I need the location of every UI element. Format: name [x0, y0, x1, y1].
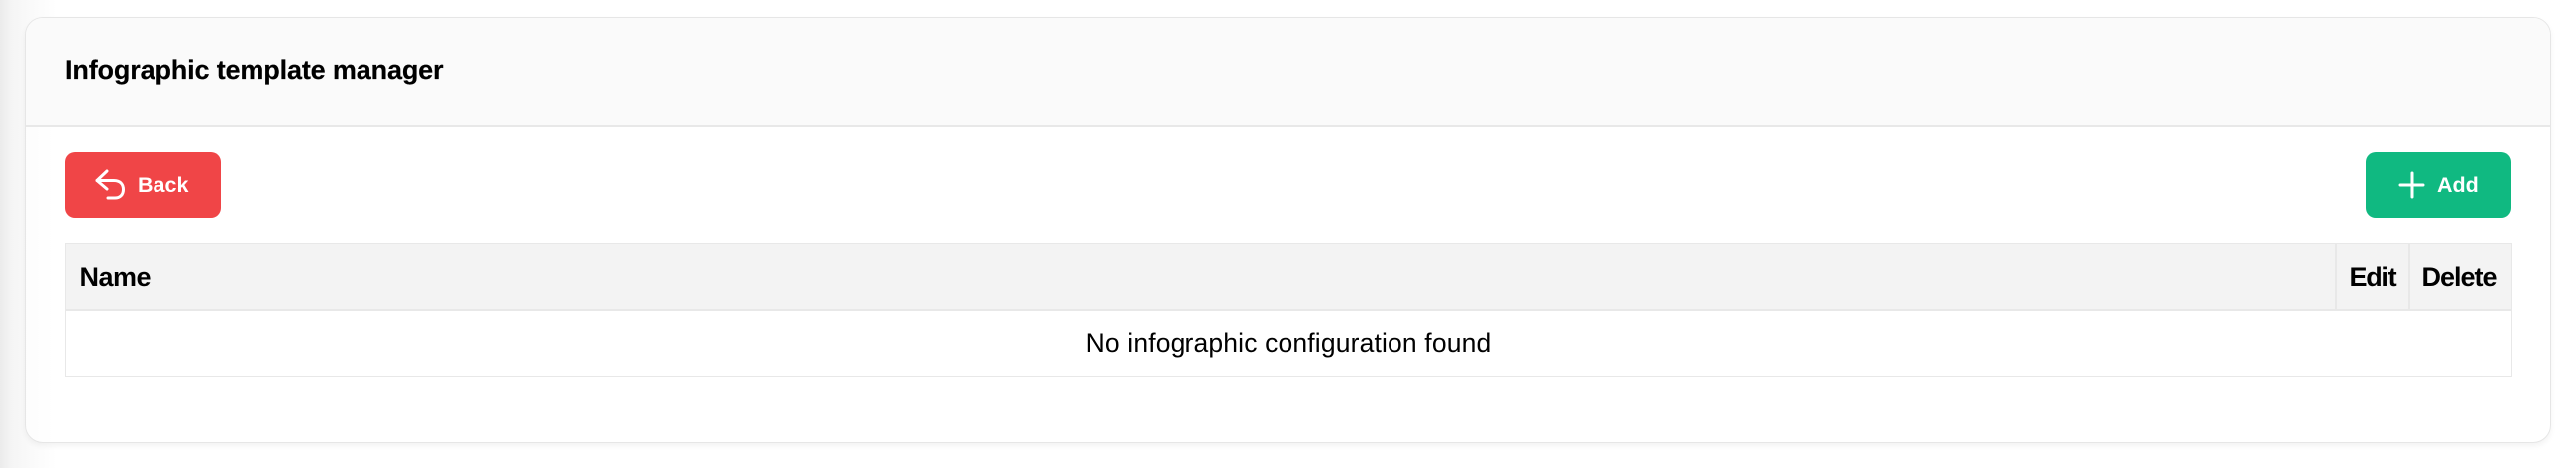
card header bar [26, 18, 2550, 127]
column header: edit: Edit [2349, 262, 2395, 292]
edit column divider [2335, 244, 2337, 309]
left edge shadow [0, 0, 57, 468]
add button [2366, 152, 2511, 218]
table header row [66, 244, 2511, 311]
back button [65, 152, 221, 218]
add label: Add [2437, 173, 2479, 197]
column header: delete: Delete [2422, 262, 2497, 292]
icon: back arrow [95, 169, 125, 200]
column header: name: Name [79, 262, 151, 292]
icon: plus [2399, 172, 2424, 198]
empty state message: No infographic configuration found [1086, 328, 1491, 358]
delete column divider [2408, 244, 2409, 309]
heading: Infographic template manager [65, 55, 443, 85]
back label: Back [138, 173, 188, 197]
table: infographic configurations [65, 243, 2512, 377]
